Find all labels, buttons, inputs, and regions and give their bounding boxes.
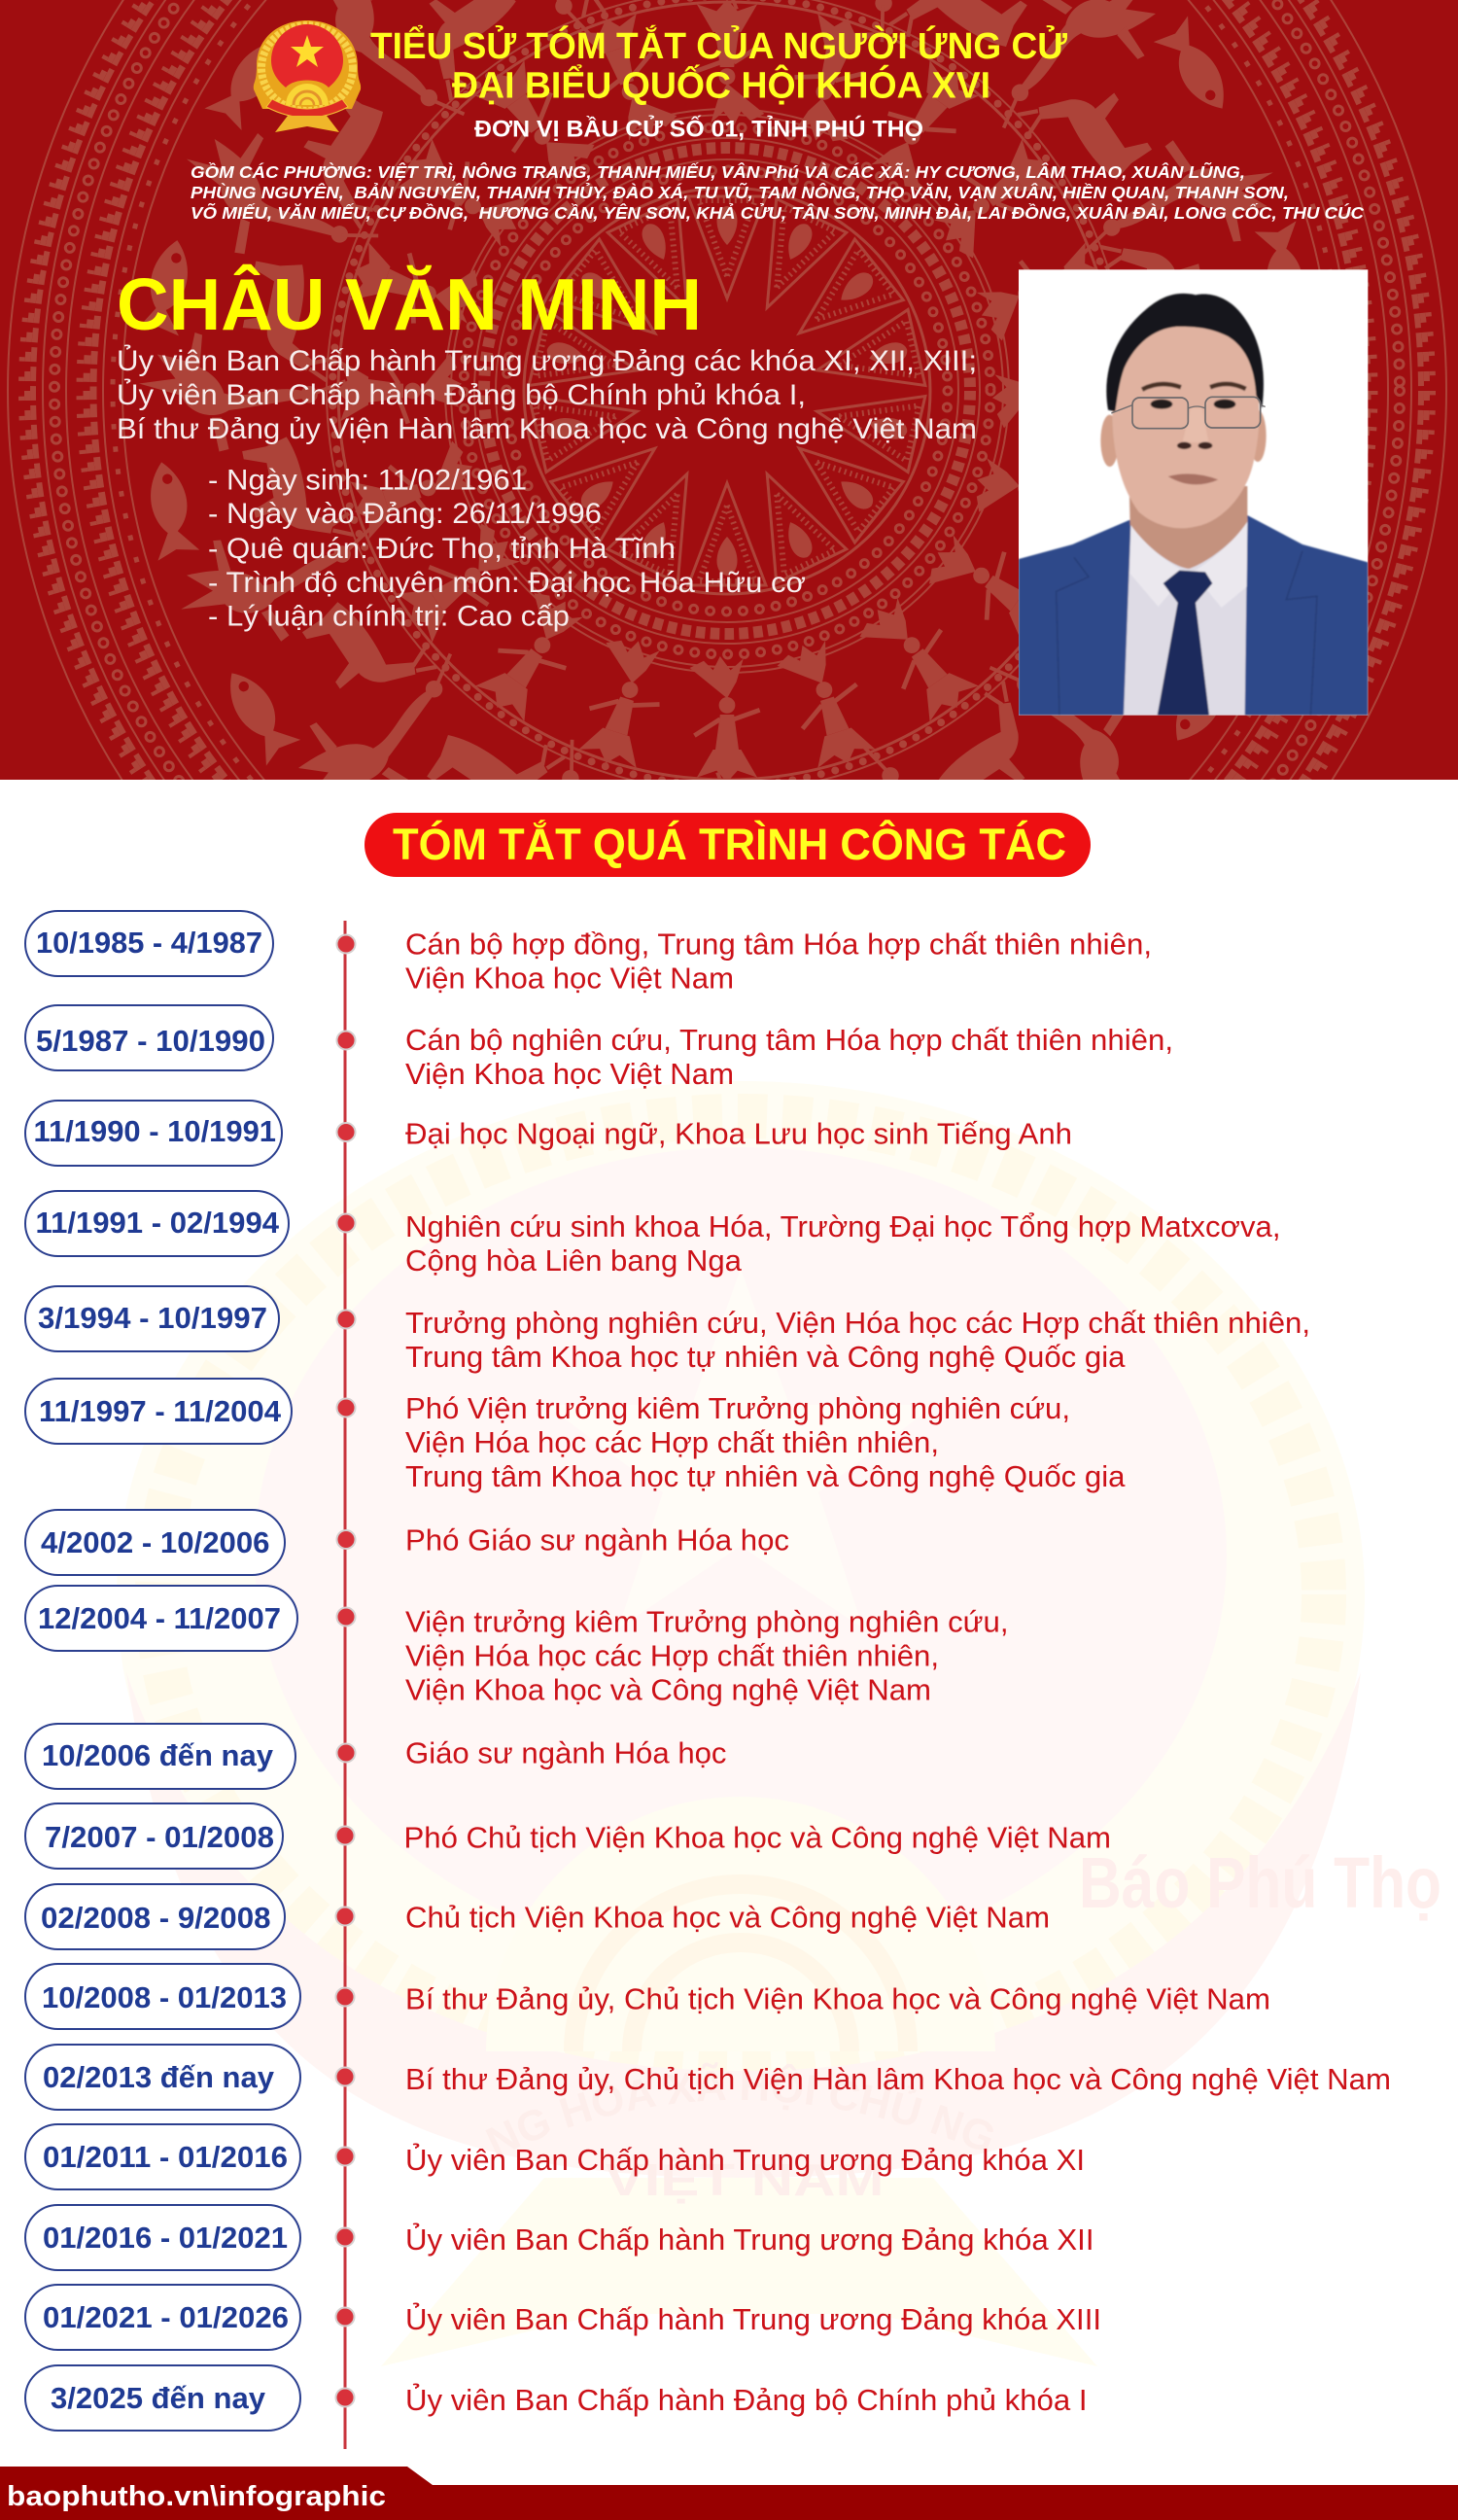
timeline row: 01/2016 - 01/2021: 01/2016 - 01/2021 (43, 2221, 288, 2255)
timeline row: 3/2025 đến nay (25, 2365, 1087, 2431)
timeline row: 01/2016 - 01/2021 (25, 2205, 1094, 2270)
timeline row: 01/2011 - 01/2016: Ủy viên Ban Chấp hành Trung ương Đảng khóa XI (405, 2142, 1085, 2177)
timeline row: 01/2021 - 01/2026 (25, 2285, 1101, 2350)
icon: national emblem (254, 20, 361, 132)
timeline row: 12/2004 - 11/2007 (25, 1586, 1009, 1707)
timeline row: 5/1987 - 10/1990 (25, 1005, 1173, 1091)
text: wards and communes list: VÕ MIẾU, VĂN MIẾU, CỰ ĐỒNG, HƯƠNG CẦN, YÊN SƠN, KHẢ CỬU, TÂN SƠN, MINH ĐÀI, LAI ĐỒNG, XUÂN ĐÀI, LONG CỐC, THU CÚC (191, 202, 1364, 223)
timeline row: 11/1991 - 02/1994: Cộng hòa Liên bang Nga (405, 1244, 742, 1278)
timeline row: 02/2013 đến nay: 02/2013 đến nay (43, 2060, 275, 2094)
timeline row: 3/1994 - 10/1997: Trung tâm Khoa học tự nhiên và Công nghệ Quốc gia (405, 1341, 1126, 1374)
text: positions: Ủy viên Ban Chấp hành Đảng bộ Chính phủ khóa I, (117, 378, 806, 411)
heading: title: ĐẠI BIỂU QUỐC HỘI KHÓA XVI (452, 62, 990, 107)
timeline row: 01/2016 - 01/2021: Ủy viên Ban Chấp hành Trung ương Đảng khóa XII (405, 2222, 1094, 2257)
timeline row: 02/2008 - 9/2008: Chủ tịch Viện Khoa học và Công nghệ Việt Nam (405, 1902, 1050, 1935)
timeline row: 10/1985 - 4/1987 (25, 911, 1152, 996)
timeline row: 11/1990 - 10/1991: Đại học Ngoại ngữ, Khoa Lưu học sinh Tiếng Anh (405, 1118, 1072, 1151)
timeline row: 10/1985 - 4/1987: Viện Khoa học Việt Nam (405, 962, 734, 996)
portrait photo (1019, 269, 1368, 716)
text: personal details: - Lý luận chính trị: Cao cấp (208, 601, 570, 632)
timeline row: 01/2021 - 01/2026: 01/2021 - 01/2026 (43, 2300, 289, 2334)
timeline row: 10/2006 đến nay: 10/2006 đến nay (42, 1738, 274, 1772)
heading: candidate name: CHÂU VĂN MINH (117, 263, 702, 345)
timeline row: 11/1990 - 10/1991: 11/1990 - 10/1991 (33, 1114, 276, 1148)
timeline row: 7/2007 - 01/2008: 7/2007 - 01/2008 (45, 1820, 274, 1854)
timeline row: 3/1994 - 10/1997 (25, 1286, 1310, 1374)
timeline row: 10/2008 - 01/2013: 10/2008 - 01/2013 (42, 1980, 287, 2014)
text: positions (117, 344, 977, 445)
timeline row: 11/1997 - 11/2004 (25, 1379, 1126, 1493)
text: personal details: - Quê quán: Đức Thọ, tỉnh Hà Tĩnh (208, 533, 676, 565)
timeline row: 4/2002 - 10/2006: 4/2002 - 10/2006 (41, 1525, 270, 1559)
timeline row: 12/2004 - 11/2007: 12/2004 - 11/2007 (38, 1601, 281, 1635)
timeline row: 3/2025 đến nay: 3/2025 đến nay (51, 2381, 266, 2415)
timeline row: 10/2008 - 01/2013 (25, 1964, 1270, 2029)
text: wards and communes list (191, 161, 1364, 223)
footer bar (0, 2467, 1458, 2520)
timeline row: 02/2008 - 9/2008: 02/2008 - 9/2008 (41, 1901, 270, 1935)
text: personal details: - Trình độ chuyên môn: Đại học Hóa Hữu cơ (208, 567, 806, 599)
timeline row: 11/1997 - 11/2004: 11/1997 - 11/2004 (39, 1394, 282, 1428)
text: positions: Ủy viên Ban Chấp hành Trung ương Đảng các khóa XI, XII, XIII; (117, 344, 977, 377)
text: wards and communes list: PHÙNG NGUYÊN, BẢN NGUYÊN, THANH THỦY, ĐÀO XÁ, TU VŨ, TAM NÔNG, THỌ VĂN, VẠN XUÂN, HIỀN QUAN, THANH SƠN, (191, 182, 1289, 202)
timeline row: 10/2006 đến nay (25, 1724, 727, 1789)
heading: title: TIỂU SỬ TÓM TẮT CỦA NGƯỜI ỨNG CỬ (370, 23, 1067, 67)
timeline row: 10/1985 - 4/1987: Cán bộ hợp đồng, Trung tâm Hóa hợp chất thiên nhiên, (405, 928, 1152, 961)
timeline row: 01/2021 - 01/2026: Ủy viên Ban Chấp hành Trung ương Đảng khóa XIII (405, 2301, 1101, 2336)
timeline row: 5/1987 - 10/1990: 5/1987 - 10/1990 (36, 1024, 265, 1058)
timeline row: 5/1987 - 10/1990: Cán bộ nghiên cứu, Trung tâm Hóa hợp chất thiên nhiên, (405, 1024, 1173, 1057)
timeline row: 4/2002 - 10/2006 (25, 1510, 789, 1575)
timeline row: 7/2007 - 01/2008 (25, 1803, 1111, 1869)
timeline row: 3/1994 - 10/1997: 3/1994 - 10/1997 (38, 1301, 267, 1335)
timeline row: 5/1987 - 10/1990: Viện Khoa học Việt Nam (405, 1058, 734, 1091)
text: personal details: - Ngày sinh: 11/02/1961 (208, 465, 527, 496)
timeline row: 11/1997 - 11/2004: Phó Viện trưởng kiêm Trưởng phòng nghiên cứu, (405, 1392, 1070, 1425)
text: personal details: - Ngày vào Đảng: 26/11/1996 (208, 498, 602, 530)
timeline row: 4/2002 - 10/2006: Phó Giáo sư ngành Hóa học (405, 1524, 789, 1558)
timeline row: 11/1991 - 02/1994 (25, 1191, 1281, 1278)
timeline row: 10/2008 - 01/2013: Bí thư Đảng ủy, Chủ tịch Viện Khoa học và Công nghệ Việt Nam (405, 1983, 1270, 2016)
timeline row: 7/2007 - 01/2008: Phó Chủ tịch Viện Khoa học và Công nghệ Việt Nam (404, 1822, 1111, 1855)
timeline row: 02/2013 đến nay (25, 2045, 1391, 2110)
timeline row: 02/2008 - 9/2008 (25, 1884, 1050, 1949)
panel: header banner (0, 0, 1458, 780)
text: constituency: ĐƠN VỊ BẦU CỬ SỐ 01, TỈNH PHÚ THỌ (474, 115, 923, 142)
timeline row: 11/1991 - 02/1994: Nghiên cứu sinh khoa Hóa, Trường Đại học Tổng hợp Matxcơva, (405, 1210, 1281, 1243)
heading: title (370, 23, 1067, 107)
text: positions: Bí thư Đảng ủy Viện Hàn lâm Khoa học và Công nghệ Việt Nam (117, 413, 977, 445)
timeline row: 11/1990 - 10/1991 (25, 1101, 1072, 1166)
timeline row: 3/2025 đến nay: Ủy viên Ban Chấp hành Đảng bộ Chính phủ khóa I (405, 2382, 1087, 2417)
timeline row: 10/1985 - 4/1987: 10/1985 - 4/1987 (36, 926, 262, 960)
timeline row: 11/1997 - 11/2004: Trung tâm Khoa học tự nhiên và Công nghệ Quốc gia (405, 1460, 1126, 1493)
timeline row: 12/2004 - 11/2007: Viện trưởng kiêm Trưởng phòng nghiên cứu, (405, 1606, 1009, 1639)
text: wards and communes list: GỒM CÁC PHƯỜNG: VIỆT TRÌ, NÔNG TRANG, THANH MIẾU, VÂN Phú VÀ CÁC XÃ: HY CƯƠNG, LÂM THAO, XUÂN LŨNG, (191, 161, 1245, 182)
timeline row: 10/2006 đến nay: Giáo sư ngành Hóa học (405, 1736, 727, 1769)
text: personal details (208, 465, 806, 632)
bronze drum pattern background (7, 0, 1447, 780)
timeline row: 3/1994 - 10/1997: Trưởng phòng nghiên cứu, Viện Hóa học các Hợp chất thiên nhiên, (405, 1307, 1310, 1340)
watermark: pale national emblem background: VIỆT NAM (605, 2154, 885, 2205)
timeline row: 02/2013 đến nay: Bí thư Đảng ủy, Chủ tịch Viện Hàn lâm Khoa học và Công nghệ Việt Nam (405, 2063, 1391, 2096)
timeline row: 12/2004 - 11/2007: Viện Khoa học và Công nghệ Việt Nam (405, 1674, 931, 1707)
timeline row: 11/1991 - 02/1994: 11/1991 - 02/1994 (35, 1206, 280, 1240)
footer bar: baophutho.vn\infographic (7, 2481, 386, 2512)
timeline row: 01/2011 - 01/2016 (25, 2124, 1085, 2189)
heading: career summary pill: TÓM TẮT QUÁ TRÌNH CÔNG TÁC (393, 820, 1066, 869)
timeline row: 12/2004 - 11/2007: Viện Hóa học các Hợp chất thiên nhiên, (405, 1639, 939, 1672)
timeline row: 01/2011 - 01/2016: 01/2011 - 01/2016 (43, 2140, 288, 2174)
timeline row: 11/1997 - 11/2004: Viện Hóa học các Hợp chất thiên nhiên, (405, 1426, 939, 1459)
timeline line (344, 921, 346, 2449)
